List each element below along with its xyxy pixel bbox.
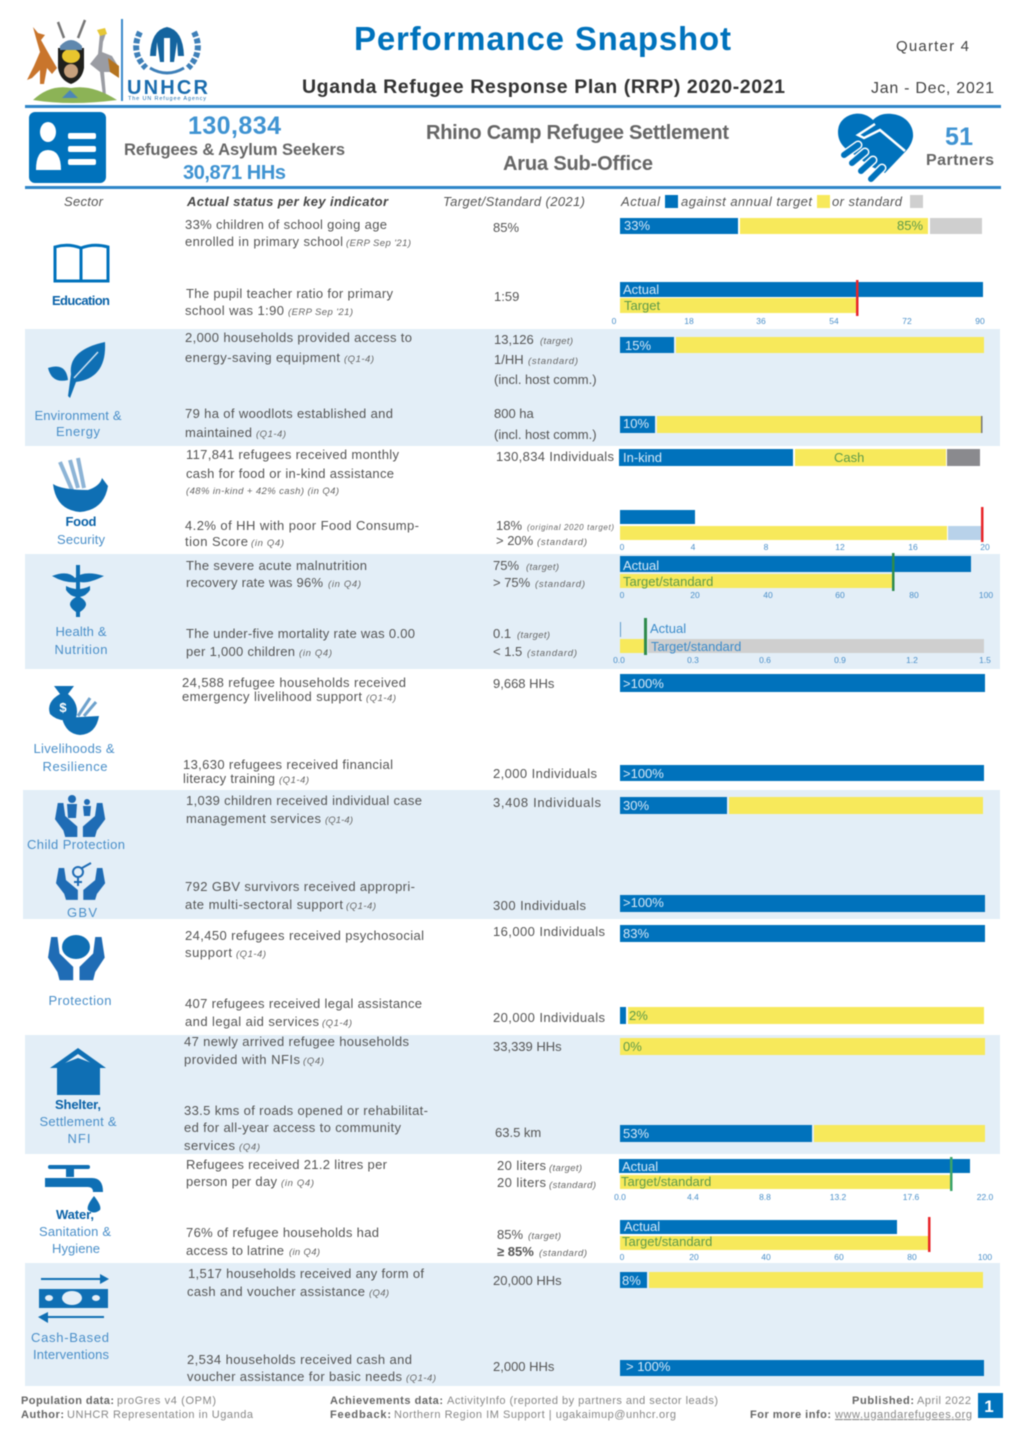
- sector: education: [52, 245, 110, 308]
- logo: UNHCR: UNHCR: [127, 77, 209, 99]
- footer: population data: [21, 1395, 254, 1421]
- indicator: cva any form: 8%: [622, 1273, 641, 1288]
- footer: achievements data: Northern Region IM Support | ugakaimup@unhcr.org: [394, 1409, 676, 1421]
- footer: population data: Population data:: [21, 1395, 114, 1407]
- icon: population card: [29, 112, 106, 183]
- indicator: acute malnutrition: The severe acute malnutrition: [186, 558, 367, 573]
- indicator: litres per person: Actual: [622, 1159, 658, 1174]
- table header: sector: Sector: [64, 194, 104, 209]
- partners: [926, 123, 994, 169]
- indicator: food consumption score: 18%: [496, 518, 522, 533]
- indicator: pupil teacher ratio: Target: [624, 298, 661, 313]
- indicator: litres per person: Target/standard: [621, 1174, 711, 1189]
- footer: achievements data: [330, 1395, 718, 1421]
- footer: published: [750, 1395, 972, 1421]
- indicator: basic needs: voucher assistance for basic needs: [187, 1369, 402, 1384]
- indicator: woodlots: 79 ha of woodlots established and: [185, 406, 393, 421]
- indicator: acute malnutrition: Actual: [623, 558, 659, 573]
- legend: Actual: [620, 194, 661, 209]
- indicator: nfis: 0%: [623, 1039, 642, 1054]
- indicator: under-five mortality: [186, 618, 991, 665]
- sector: cash-based interventions: [31, 1274, 110, 1362]
- indicator: under-five mortality: < 1.5: [493, 644, 522, 659]
- footer: published: April 2022: [917, 1395, 971, 1407]
- footer: published: For more info:: [750, 1409, 831, 1421]
- indicator: cash or in-kind: 130,834 Individuals: [496, 449, 614, 464]
- indicator: roads: services: [184, 1138, 236, 1153]
- indicator: latrine access: (target): [528, 1231, 561, 1242]
- indicator: litres per person: 8.8: [759, 1192, 771, 1202]
- indicator: psychosocial: (Q1-4): [236, 949, 266, 960]
- indicator: roads: ed for all-year access to community: [184, 1120, 402, 1135]
- sector: protection: [48, 935, 112, 1008]
- sector: shelter, settlement and nfi: Shelter,: [55, 1097, 101, 1112]
- footer: achievements data: ActivityInfo (reported by partners and sector leads): [447, 1395, 718, 1407]
- indicator: woodlots: [185, 406, 982, 442]
- indicator: emergency livelihood: (Q1-4): [366, 693, 396, 704]
- indicator: woodlots: maintained: [185, 425, 252, 440]
- indicator: latrine access: 60: [834, 1252, 844, 1262]
- indicator: gbv survivors: >100%: [623, 895, 664, 910]
- indicator: under-five mortality: 0.0: [613, 655, 625, 665]
- sector: water, sanitation and hygiene: Hygiene: [52, 1241, 100, 1256]
- indicator: pupil teacher ratio: 72: [902, 316, 912, 326]
- indicator: food consumption score: 20: [980, 542, 990, 552]
- indicator: pupil teacher ratio: school was 1:90: [185, 303, 284, 318]
- indicator: litres per person: (target): [549, 1163, 582, 1174]
- indicator: under-five mortality: 0.6: [759, 655, 771, 665]
- indicator: gbv survivors: 792 GBV survivors received appropri-: [185, 879, 415, 894]
- indicator: litres per person: person per day: [186, 1174, 278, 1189]
- indicator: under-five mortality: (target): [517, 630, 550, 641]
- indicator: pupil teacher ratio: 1:59: [494, 289, 519, 304]
- indicator: litres per person: 20 liters: [497, 1175, 546, 1190]
- indicator: latrine access: 100: [978, 1252, 992, 1262]
- indicator: energy saving: (incl. host comm.): [494, 372, 597, 387]
- indicator: under-five mortality: 0.3: [687, 655, 699, 665]
- indicator: latrine access: 0: [620, 1252, 625, 1262]
- indicator: school enrolment: 85%: [897, 218, 923, 233]
- footer: achievements data: Feedback:: [330, 1409, 391, 1421]
- sector: environment and energy: Energy: [56, 424, 100, 439]
- indicator: cash or in-kind: Cash: [834, 450, 864, 465]
- indicator: acute malnutrition: Target/standard: [623, 574, 713, 589]
- sector: water, sanitation and hygiene: [39, 1165, 111, 1256]
- icon: handshake heart: [838, 114, 913, 179]
- indicator: latrine access: (in Q4): [289, 1247, 320, 1258]
- band: protection: [23, 790, 1000, 919]
- indicator: under-five mortality: (in Q4): [299, 648, 332, 659]
- indicator: case management: 3,408 Individuals: [493, 795, 602, 810]
- indicator: legal assistance: 2%: [629, 1008, 648, 1023]
- indicator: school enrolment: enrolled in primary school: [185, 234, 343, 249]
- indicator: roads: 53%: [623, 1126, 649, 1141]
- indicator: food consumption score: (standard): [537, 537, 587, 548]
- indicator: emergency livelihood: emergency livelihood support: [182, 689, 362, 704]
- indicator: financial literacy: literacy training: [183, 771, 275, 786]
- indicator: pupil teacher ratio: 18: [684, 316, 694, 326]
- indicator: nfis: 47 newly arrived refugee households: [184, 1034, 410, 1049]
- indicator: cva any form: 20,000 HHs: [493, 1273, 562, 1288]
- indicator: case management: management services: [186, 811, 322, 826]
- indicator: cash or in-kind: 117,841 refugees received monthly: [186, 447, 400, 462]
- indicator: latrine access: 80: [907, 1252, 917, 1262]
- indicator: emergency livelihood: 9,668 HHs: [493, 676, 555, 691]
- partners: 51: [945, 123, 973, 151]
- indicator: under-five mortality: (standard): [527, 648, 577, 659]
- indicator: food consumption score: tion Score: [185, 534, 248, 549]
- indicator: woodlots: 800 ha: [494, 406, 535, 421]
- indicator: gbv survivors: (Q1-4): [346, 901, 376, 912]
- indicator: school enrolment: 33%: [624, 218, 650, 233]
- indicator: roads: 33.5 kms of roads opened or rehabilitat-: [184, 1103, 428, 1118]
- indicator: energy saving: 15%: [625, 338, 651, 353]
- indicator: litres per person: Refugees received 21.2 litres per: [186, 1157, 388, 1172]
- indicator: cash or in-kind: cash for food or in-kind assistance: [186, 466, 394, 481]
- sector: gbv: [56, 863, 105, 920]
- sector: livelihoods and resilience: $: [59, 700, 67, 715]
- sector: child protection: Child Protection: [27, 837, 125, 852]
- indicator: psychosocial: 83%: [623, 926, 649, 941]
- population figures: Refugees & Asylum Seekers: [124, 141, 345, 159]
- population figures: 130,834: [188, 112, 281, 140]
- indicator: pupil teacher ratio: 54: [829, 316, 839, 326]
- sector: cash-based interventions: Interventions: [33, 1347, 110, 1362]
- indicator: cva any form: 1,517 households received any form of: [188, 1266, 424, 1281]
- indicator: pupil teacher ratio: 90: [975, 316, 985, 326]
- indicator: gbv survivors: [185, 879, 985, 913]
- indicator: pupil teacher ratio: (ERP Sep '21): [288, 307, 353, 318]
- indicator: nfis: provided with NFIs: [184, 1052, 300, 1067]
- partners: Partners: [926, 152, 994, 169]
- indicator: legal assistance: 20,000 Individuals: [493, 1010, 606, 1025]
- indicator: pupil teacher ratio: Actual: [623, 282, 659, 297]
- indicator: financial literacy: 2,000 Individuals: [493, 766, 598, 781]
- indicator: case management: 1,039 children received individual case: [186, 793, 422, 808]
- sector: shelter, settlement and nfi: Settlement &: [40, 1114, 117, 1129]
- indicator: energy saving: 2,000 households provided access to: [185, 330, 412, 345]
- sector: food security: Food: [66, 514, 97, 529]
- indicator: energy saving: (Q1-4): [344, 354, 374, 365]
- sector: environment and energy: Environment &: [34, 408, 122, 423]
- footer: achievements data: Achievements data:: [330, 1395, 443, 1407]
- indicator: acute malnutrition: > 75%: [493, 575, 531, 590]
- indicator: litres per person: (standard): [549, 1180, 596, 1191]
- header rule: [25, 105, 1001, 108]
- indicator: latrine access: Target/standard: [622, 1234, 712, 1249]
- sector: food security: Security: [57, 532, 106, 547]
- indicator: basic needs: 2,534 households received cash and: [187, 1352, 412, 1367]
- indicator: food consumption score: [185, 507, 990, 552]
- indicator: basic needs: [187, 1352, 984, 1384]
- indicator: litres per person: 13.2: [830, 1192, 847, 1202]
- population figures: [124, 112, 345, 184]
- logo: UNHCR: The UN Refugee Agency: [128, 96, 206, 102]
- indicator: case management: 30%: [623, 798, 649, 813]
- footer: published: Published:: [852, 1395, 914, 1407]
- indicator: financial literacy: >100%: [623, 766, 664, 781]
- page number: [978, 1393, 1003, 1418]
- indicator: pupil teacher ratio: The pupil teacher ratio for primary: [186, 286, 394, 301]
- indicator: woodlots: (Q1-4): [256, 429, 286, 440]
- indicator: food consumption score: 0: [620, 542, 625, 552]
- indicator: food consumption score: 8: [764, 542, 769, 552]
- indicator: psychosocial: support: [185, 945, 232, 960]
- sector: education: Education: [52, 293, 110, 308]
- indicator: woodlots: 10%: [623, 416, 649, 431]
- indicator: school enrolment: (ERP Sep '21): [346, 238, 411, 249]
- sector: health and nutrition: Health &: [56, 624, 107, 639]
- indicator: basic needs: (Q1-4): [406, 1373, 436, 1384]
- indicator: latrine access: Actual: [624, 1219, 660, 1234]
- indicator: latrine access: ≥ 85%: [497, 1244, 534, 1259]
- indicator: energy saving: 13,126: [494, 332, 534, 347]
- population figures: 30,871 HHs: [183, 162, 286, 184]
- band: cash: [25, 1263, 1000, 1386]
- footer: population data: Author:: [21, 1409, 64, 1421]
- indicator: food consumption score: 12: [835, 542, 845, 552]
- indicator: latrine access: 76% of refugee households had: [186, 1225, 379, 1240]
- indicator: litres per person: 4.4: [687, 1192, 699, 1202]
- indicator: psychosocial: 16,000 Individuals: [493, 924, 606, 939]
- indicator: under-five mortality: 0.1: [493, 626, 511, 641]
- indicator: emergency livelihood: [182, 674, 985, 704]
- sector: livelihoods and resilience: Livelihoods &: [34, 741, 115, 756]
- settlement name: Arua Sub-Office: [503, 153, 653, 175]
- indicator: cash or in-kind: [186, 447, 980, 497]
- sector: environment and energy: [34, 342, 122, 439]
- subtitle: Uganda Refugee Response Plan (RRP) 2020-2021: [302, 76, 785, 98]
- indicator: cash or in-kind: (48% in-kind + 42% cash) (in Q4): [186, 486, 339, 497]
- title: Performance Snapshot: [354, 20, 731, 57]
- indicator: cash or in-kind: In-kind: [623, 450, 662, 465]
- indicator: roads: [184, 1103, 985, 1153]
- indicator: case management: (Q1-4): [325, 815, 353, 826]
- indicator: pupil teacher ratio: 0: [612, 316, 617, 326]
- legend: against annual target: [681, 194, 813, 209]
- indicator: latrine access: [186, 1217, 992, 1262]
- date range: Jan - Dec, 2021: [871, 80, 994, 97]
- indicator: food consumption score: (original 2020 target): [527, 523, 614, 532]
- indicator: litres per person: 20 liters: [497, 1158, 546, 1173]
- indicator: financial literacy: [183, 757, 984, 786]
- indicator: acute malnutrition: 100: [979, 590, 993, 600]
- indicator: energy saving: (standard): [528, 356, 578, 367]
- indicator: emergency livelihood: 24,588 refugee households received: [182, 675, 406, 690]
- indicator: under-five mortality: Target/standard: [651, 639, 741, 654]
- indicator: acute malnutrition: (in Q4): [328, 579, 361, 590]
- indicator: nfis: 33,339 HHs: [493, 1039, 562, 1054]
- indicator: cva any form: cash and voucher assistance: [187, 1284, 365, 1299]
- indicator: energy saving: 1/HH: [494, 352, 524, 367]
- indicator: latrine access: 85%: [497, 1227, 523, 1242]
- footer: population data: UNHCR Representation in Uganda: [67, 1409, 254, 1421]
- indicator: gbv survivors: 300 Individuals: [493, 898, 586, 913]
- band: environment: [25, 329, 1000, 446]
- legend: [620, 194, 923, 209]
- indicator: food consumption score: > 20%: [496, 533, 534, 548]
- indicator: school enrolment: 33% children of school going age: [185, 217, 387, 232]
- sector: gbv: GBV: [67, 905, 97, 920]
- indicator: basic needs: > 100%: [626, 1359, 671, 1374]
- sector: livelihoods and resilience: [34, 686, 115, 774]
- logo: Uganda coat of arms: [27, 20, 119, 103]
- sector: health and nutrition: Nutrition: [54, 642, 108, 657]
- indicator: acute malnutrition: 20: [690, 590, 700, 600]
- indicator: cva any form: [187, 1266, 983, 1299]
- indicator: financial literacy: (Q1-4): [279, 775, 309, 786]
- indicator: litres per person: 0.0: [614, 1192, 626, 1202]
- indicator: under-five mortality: per 1,000 children: [186, 644, 295, 659]
- indicator: food consumption score: 4: [691, 542, 696, 552]
- indicator: school enrolment: [185, 217, 982, 249]
- indicator: cva any form: (Q4): [369, 1288, 389, 1299]
- indicator: under-five mortality: The under-five mortality rate was 0.00: [186, 626, 415, 641]
- indicator: case management: [186, 793, 983, 826]
- indicator: latrine access: 40: [761, 1252, 771, 1262]
- quarter: Quarter 4: [896, 38, 969, 55]
- indicator: under-five mortality: Actual: [650, 621, 686, 636]
- indicator: food consumption score: (in Q4): [251, 538, 284, 549]
- indicator: food consumption score: 4.2% of HH with poor Food Consump-: [185, 518, 419, 533]
- indicator: school enrolment: 85%: [493, 220, 519, 235]
- table header: indicator: Actual status per key indicator: [186, 194, 389, 209]
- sector: protection: Protection: [48, 993, 112, 1008]
- indicator: legal assistance: [185, 996, 984, 1029]
- indicator: woodlots: (incl. host comm.): [494, 427, 597, 442]
- indicator: latrine access: 20: [689, 1252, 699, 1262]
- sector: health and nutrition: [52, 565, 108, 657]
- indicator: basic needs: 2,000 HHs: [493, 1359, 555, 1374]
- indicator: pupil teacher ratio: [185, 280, 985, 326]
- band: health: [25, 554, 1000, 669]
- indicator: acute malnutrition: (standard): [535, 579, 585, 590]
- indicator: latrine access: access to latrine: [186, 1243, 284, 1258]
- footer: population data: proGres v4 (OPM): [117, 1395, 216, 1407]
- indicator: psychosocial: 24,450 refugees received psychosocial: [185, 928, 424, 943]
- indicator: nfis: (Q4): [303, 1056, 324, 1067]
- indicator: acute malnutrition: 0: [620, 590, 625, 600]
- sector: water, sanitation and hygiene: Water,: [56, 1207, 94, 1222]
- indicator: pupil teacher ratio: 36: [756, 316, 766, 326]
- settlement name: Rhino Camp Refugee Settlement: [426, 122, 729, 144]
- sector: shelter, settlement and nfi: [40, 1048, 117, 1146]
- indicator: legal assistance: and legal aid services: [185, 1014, 320, 1029]
- indicator: energy saving: [185, 330, 984, 387]
- indicator: litres per person: (in Q4): [281, 1178, 314, 1189]
- indicator: psychosocial: [185, 924, 985, 960]
- legend: or standard: [832, 194, 903, 209]
- indicator: acute malnutrition: recovery rate was 96%: [186, 575, 323, 590]
- indicator: gbv survivors: ate multi-sectoral support: [185, 897, 343, 912]
- footer: published: www.ugandarefugees.org: [834, 1409, 972, 1421]
- indicator: legal assistance: 407 refugees received legal assistance: [185, 996, 422, 1011]
- indicator: roads: (Q4): [239, 1142, 260, 1153]
- indicator: litres per person: 17.6: [903, 1192, 920, 1202]
- indicator: acute malnutrition: 60: [835, 590, 845, 600]
- logo: UNHCR: [127, 27, 209, 102]
- table header: target: Target/Standard (2021): [443, 194, 585, 209]
- band: shelter: [25, 1035, 1000, 1154]
- indicator: latrine access: (standard): [539, 1248, 587, 1259]
- indicator: financial literacy: 13,630 refugees received financial: [183, 757, 393, 772]
- page number: 1: [984, 1397, 994, 1416]
- indicator: legal assistance: (Q1-4): [322, 1018, 352, 1029]
- indicator: acute malnutrition: 75%: [493, 558, 519, 573]
- sector: livelihoods and resilience: Resilience: [42, 759, 108, 774]
- indicator: acute malnutrition: 80: [909, 590, 919, 600]
- indicator: acute malnutrition: [186, 553, 993, 600]
- indicator: emergency livelihood: >100%: [623, 676, 664, 691]
- sector: child protection: [27, 795, 125, 852]
- indicator: litres per person: 22.0: [977, 1192, 994, 1202]
- sector: shelter, settlement and nfi: NFI: [68, 1131, 90, 1146]
- indicator: litres per person: [186, 1157, 994, 1202]
- sector: cash-based interventions: Cash-Based: [31, 1330, 109, 1345]
- indicator: under-five mortality: 1.2: [906, 655, 918, 665]
- indicator: under-five mortality: 1.5: [979, 655, 991, 665]
- indicator: food consumption score: 16: [908, 542, 918, 552]
- indicator: nfis: [184, 1034, 985, 1067]
- indicator: acute malnutrition: 40: [763, 590, 773, 600]
- indicator: energy saving: energy-saving equipment: [185, 350, 340, 365]
- indicator: acute malnutrition: (target): [526, 562, 559, 573]
- settlement name: [426, 122, 729, 175]
- sector: food security: [53, 458, 108, 547]
- sector: water, sanitation and hygiene: Sanitation &: [39, 1224, 111, 1239]
- indicator: roads: 63.5 km: [495, 1125, 541, 1140]
- indicator: under-five mortality: 0.9: [834, 655, 846, 665]
- logo divider: [121, 19, 123, 101]
- section rule: [25, 186, 1001, 189]
- indicator: energy saving: (target): [540, 336, 573, 347]
